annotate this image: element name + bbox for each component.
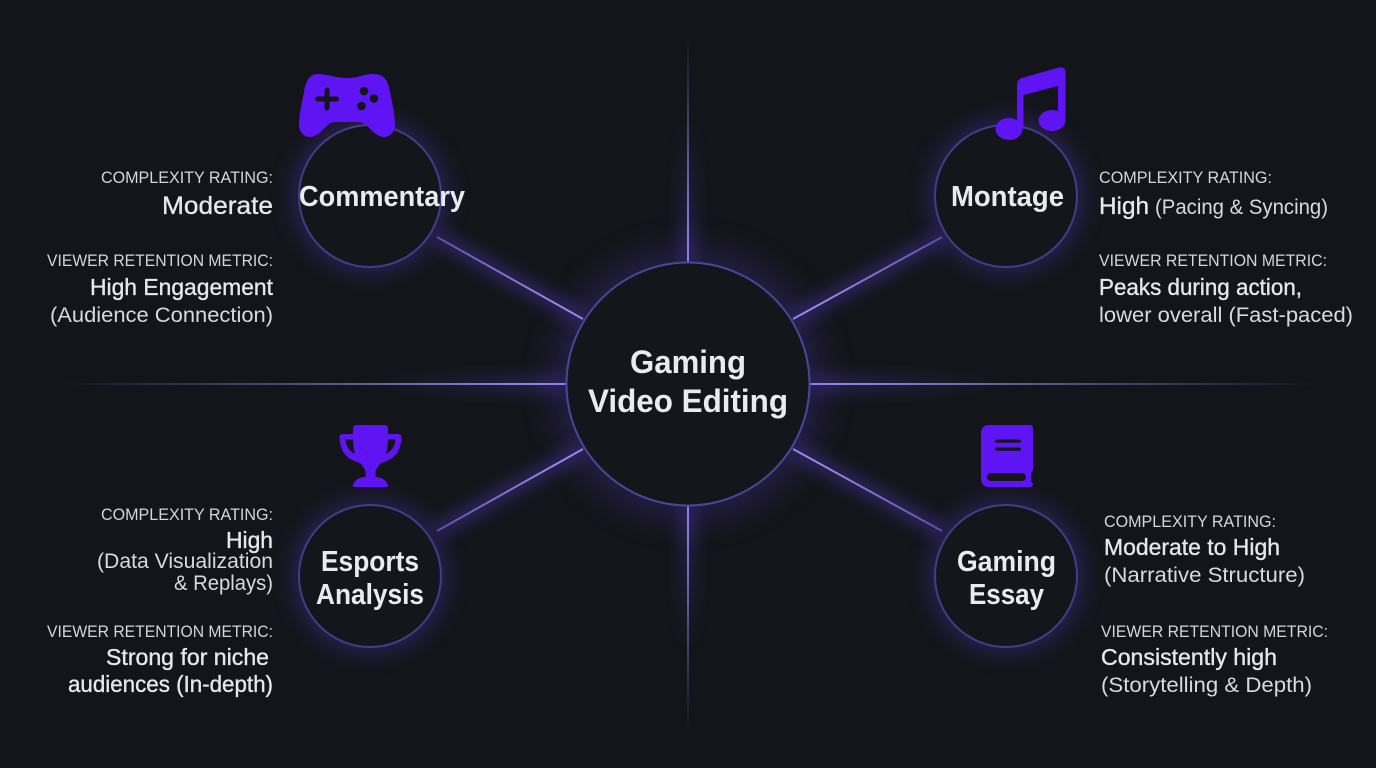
hub title: Video Editing [588,383,788,419]
text block: Esports Analysis metrics: COMPLEXITY RATING: [101,506,273,524]
icon: trophy [340,425,402,487]
text block: Commentary metrics: Moderate [162,192,273,220]
text block: Esports Analysis metrics: & Replays) [174,571,273,595]
node title: Gaming Essay: Gaming [957,546,1056,578]
node: Gaming Essay [930,500,1082,652]
text block: Montage metrics: VIEWER RETENTION METRIC: [1099,252,1327,270]
text block: Montage metrics: (Pacing & Syncing) [1155,195,1328,219]
node title: Gaming Essay: Essay [969,579,1044,611]
text block: Montage metrics: COMPLEXITY RATING: [1099,169,1272,187]
text block: Commentary metrics: (Audience Connection) [50,303,273,327]
icon: book [981,425,1033,487]
text block: Montage metrics: High [1099,193,1149,220]
node title: Esports Analysis: Analysis [316,579,424,611]
text block: Commentary metrics: COMPLEXITY RATING: [101,169,273,187]
node: Commentary [294,120,465,272]
hub title: Gaming [630,344,746,380]
text block: Esports Analysis metrics: High [226,527,273,553]
text block: Commentary metrics: VIEWER RETENTION METRIC: [47,252,273,270]
text block: Commentary metrics [47,169,274,327]
text block: Montage metrics [1099,169,1353,327]
text block: Gaming Essay metrics: Moderate to High [1104,534,1280,560]
icon: game controller [299,74,395,137]
text block: Montage metrics: Peaks during action, [1099,274,1302,300]
node: Esports Analysis [294,500,446,652]
text block: Esports Analysis metrics: VIEWER RETENTION METRIC: [47,623,273,641]
text block: Gaming Essay metrics: (Narrative Structure) [1104,563,1305,587]
text block: Esports Analysis metrics: Strong for niche [106,644,269,670]
text block: Gaming Essay metrics: VIEWER RETENTION METRIC: [1101,623,1328,641]
text block: Esports Analysis metrics: (Data Visualization [97,549,273,573]
text block: Gaming Essay metrics [1101,513,1328,697]
node title: Commentary: Commentary [299,181,465,213]
node title: Montage: Montage [951,181,1064,213]
text block: Gaming Essay metrics: (Storytelling & Depth) [1101,673,1312,697]
text block: Esports Analysis metrics: audiences (In-depth) [68,671,273,697]
icon: music note [996,67,1066,140]
text block: Commentary metrics: High Engagement [90,274,274,300]
node: Montage [930,120,1082,272]
connector glow [380,120,1000,650]
text block: Montage metrics: lower overall (Fast-paced) [1099,303,1353,327]
text block: Gaming Essay metrics: Consistently high [1101,644,1277,670]
node title: Esports Analysis: Esports [321,546,419,578]
central hub: Gaming Video Editing [560,256,816,512]
text block: Esports Analysis metrics [47,506,273,697]
text block: Gaming Essay metrics: COMPLEXITY RATING: [1104,513,1276,531]
